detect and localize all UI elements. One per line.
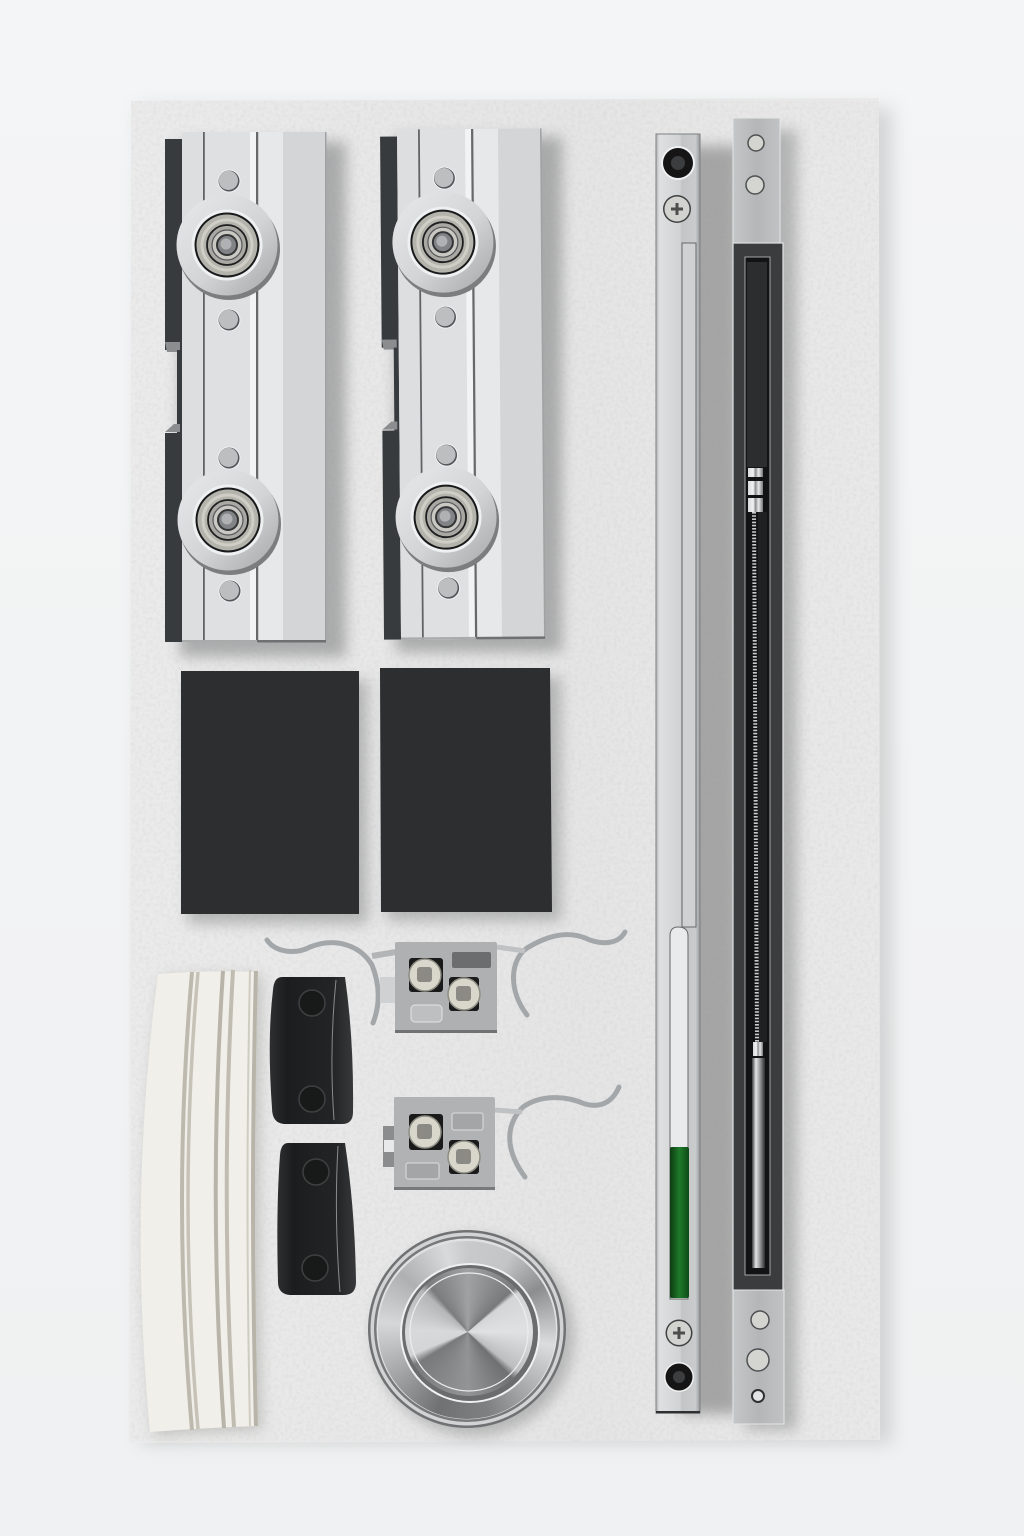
spring xyxy=(754,512,757,1042)
carrier: right roller assembly xyxy=(380,128,562,652)
black clip: lower xyxy=(277,1143,356,1295)
black plate: left xyxy=(181,671,368,924)
top plate xyxy=(733,118,780,243)
carrier: left roller assembly xyxy=(165,132,346,657)
round stainless flush pull xyxy=(368,1230,574,1436)
top screw xyxy=(663,195,691,223)
green level vial xyxy=(670,1147,689,1298)
black plate: right xyxy=(380,668,561,921)
black clip: upper xyxy=(270,977,353,1124)
white weatherstrip profile xyxy=(141,970,262,1436)
dark channel rail with spring rod xyxy=(733,118,797,1430)
aluminium rail with level window xyxy=(656,134,740,1414)
bottom black cap xyxy=(664,1362,694,1392)
bottom screw xyxy=(666,1320,692,1346)
bracket: lower with one spring arm xyxy=(383,1087,619,1190)
piston rod xyxy=(753,1042,763,1056)
panel: foam backing board xyxy=(129,98,892,1444)
bracket: upper with two spring arms xyxy=(267,932,625,1033)
upper slot xyxy=(682,243,696,927)
lower window xyxy=(670,927,688,1299)
bottom plate xyxy=(733,1290,784,1424)
couplings xyxy=(748,468,763,477)
top black cap xyxy=(661,146,695,180)
